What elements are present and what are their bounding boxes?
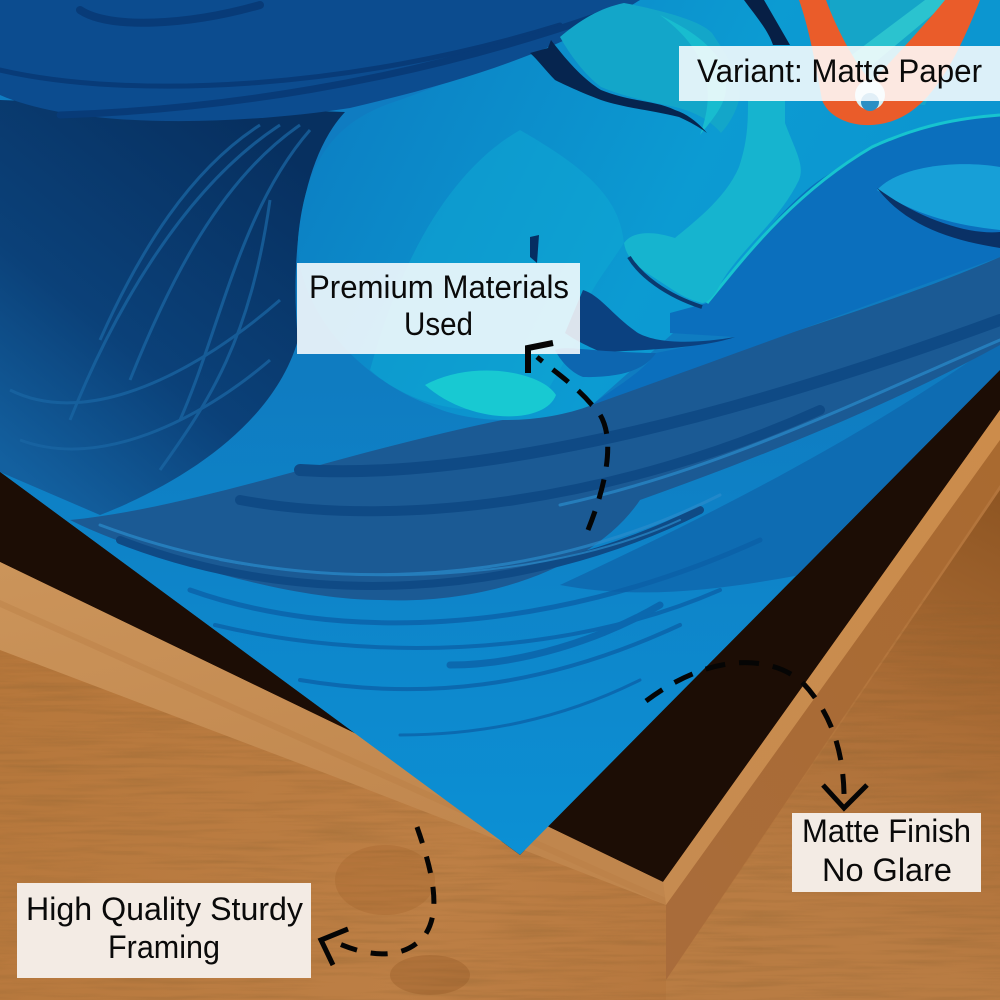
- right cheek: [592, 115, 1000, 405]
- hair dark left: [0, 100, 345, 515]
- callout: High Quality Sturdy Framing: High Quality Sturdy: [26, 891, 303, 927]
- right eye lobe: [877, 164, 1000, 230]
- frame: left bar: [0, 562, 666, 905]
- arrow: to High Quality Framing: [321, 827, 434, 965]
- callout: Matte Finish No Glare: [792, 813, 981, 892]
- arrow: to Matte Finish: [646, 663, 867, 808]
- face: [298, 0, 1000, 420]
- lower brush strokes: [190, 540, 760, 735]
- chin highlight: [425, 371, 556, 416]
- nose bridge: [624, 100, 801, 303]
- callout: High Quality Sturdy Framing: [17, 883, 311, 978]
- lips: [565, 290, 735, 352]
- callout: High Quality Sturdy Framing: Framing: [108, 929, 220, 965]
- right eyelashes: [877, 188, 1000, 248]
- cheek highlight: [370, 130, 624, 410]
- dark brush band: [70, 257, 1000, 600]
- wood table surface: [0, 410, 1000, 1000]
- arrow: to Premium Materials: [528, 343, 608, 530]
- callout: Variant Matte Paper: Variant: Matte Paper: [697, 53, 982, 89]
- left eyelashes: [530, 40, 707, 133]
- top hair lobe: [0, 0, 640, 121]
- lower lip: [555, 348, 656, 377]
- frame: interior shadow: [0, 360, 1000, 882]
- brow line: [744, 0, 790, 45]
- callout: Matte Finish No Glare: Matte Finish: [802, 813, 971, 849]
- right striped area: [560, 340, 1000, 592]
- callout: Variant Matte Paper: [679, 46, 1000, 101]
- callout: Premium Materials Used: [297, 263, 580, 354]
- frame: right bar: [663, 410, 1000, 980]
- callout: Matte Finish No Glare: No Glare: [822, 852, 952, 888]
- philtrum mark: [530, 235, 539, 263]
- right cheek edge line: [707, 115, 1000, 303]
- callout: Premium Materials Used: Premium Materials: [309, 269, 569, 305]
- callout: Premium Materials Used: Used: [404, 306, 473, 342]
- orange tilak: [799, 0, 980, 125]
- left eyelid: [560, 3, 739, 133]
- eyelid highlight: [660, 15, 726, 135]
